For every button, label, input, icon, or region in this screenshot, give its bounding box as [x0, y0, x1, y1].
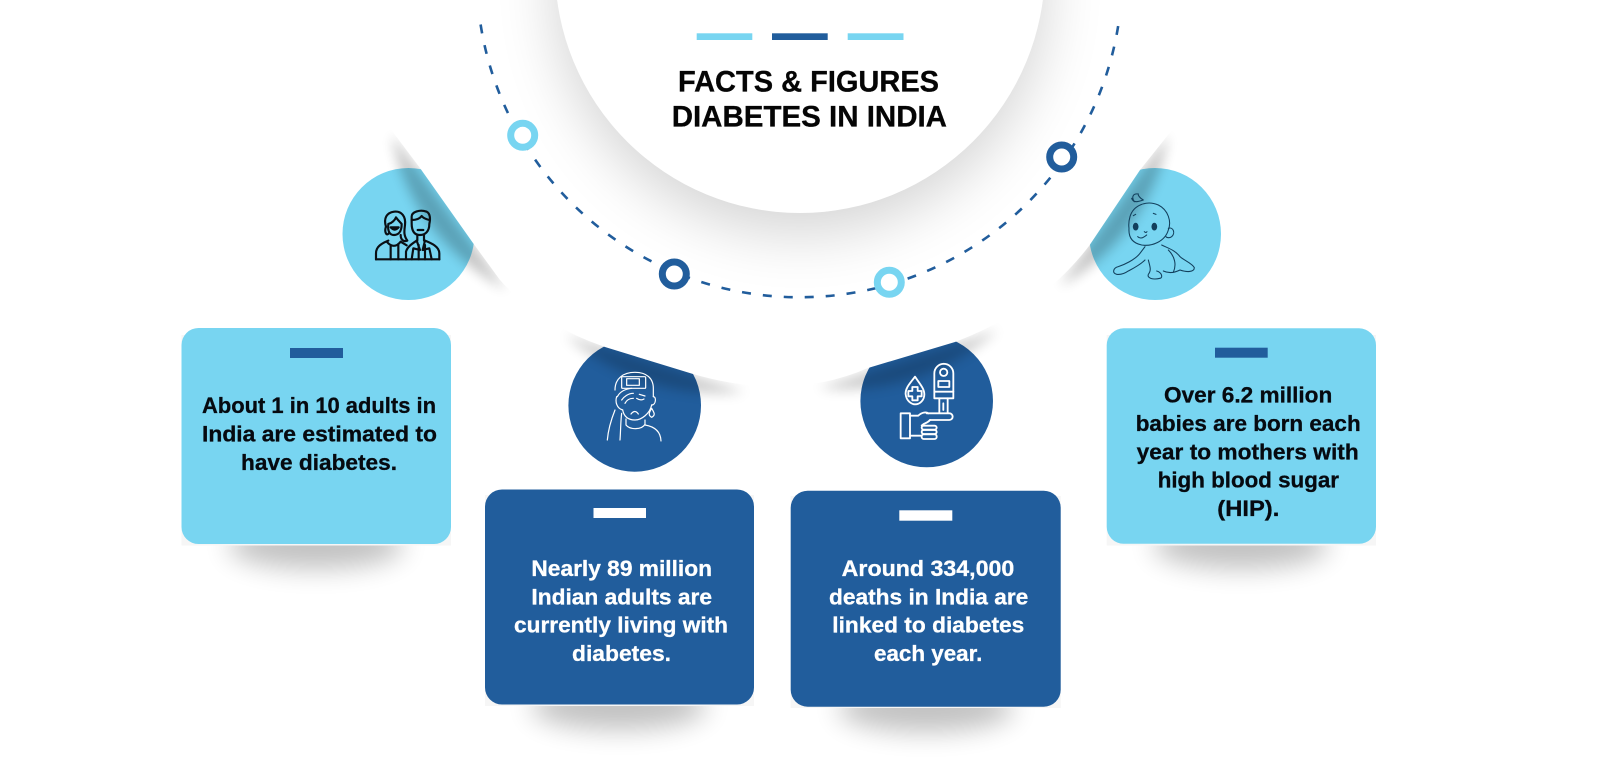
card: 1 in 10 adults: have diabetes. — [241, 450, 397, 475]
card: 334,000 deaths — [791, 491, 1061, 707]
card: 6.2 million babies: year to mothers with — [1137, 439, 1359, 464]
shadows under cards — [182, 335, 1376, 732]
icon disc: adults — [342, 168, 474, 300]
card: 6.2 million babies: (HIP). — [1217, 496, 1279, 521]
card: 6.2 million babies: Over 6.2 million — [1164, 383, 1332, 408]
card: 89 million adults: currently living with — [514, 613, 728, 638]
icon: glucose meter and hand — [901, 364, 953, 439]
card: 6.2 million babies: babies are born each — [1136, 411, 1361, 436]
card: 334,000 deaths: deaths in India are — [829, 584, 1028, 609]
card: 1 in 10 adults: India are estimated to — [202, 422, 437, 446]
card: 334,000 deaths: Around 334,000 — [842, 556, 1014, 581]
icon: man and woman — [376, 211, 439, 259]
title — [672, 66, 947, 134]
large white scalloped shape — [300, 0, 1300, 387]
icon disc: baby — [1089, 168, 1221, 300]
icon: person with forehead compress — [607, 372, 661, 441]
card: 1 in 10 adults — [182, 328, 451, 544]
card: 6.2 million babies: high blood sugar — [1158, 468, 1339, 493]
card: 89 million adults: Nearly 89 million — [531, 556, 712, 581]
title circle — [555, 0, 1045, 213]
card: 334,000 deaths: linked to diabetes — [832, 613, 1024, 638]
title: FACTS & FIGURES — [678, 66, 939, 98]
card: 334,000 deaths: each year. — [874, 641, 982, 666]
dashed arc — [481, 24, 1118, 297]
grey halo around title circle — [555, 0, 1045, 233]
icon disc: glucose meter — [860, 335, 993, 467]
title accent bars — [697, 33, 904, 40]
card: 89 million adults: Indian adults are — [531, 584, 712, 609]
arc marker rings — [511, 123, 1074, 294]
title: DIABETES IN INDIA — [672, 100, 947, 134]
cast shadows of the large white shape — [392, 135, 1168, 393]
card: 6.2 million babies — [1107, 328, 1376, 544]
card: 89 million adults: diabetes. — [572, 641, 671, 666]
icon disc: symptoms — [568, 339, 701, 472]
card: 1 in 10 adults: About 1 in 10 adults in — [202, 393, 436, 418]
icon: crawling baby — [1114, 194, 1194, 279]
card: 89 million adults — [485, 490, 754, 704]
